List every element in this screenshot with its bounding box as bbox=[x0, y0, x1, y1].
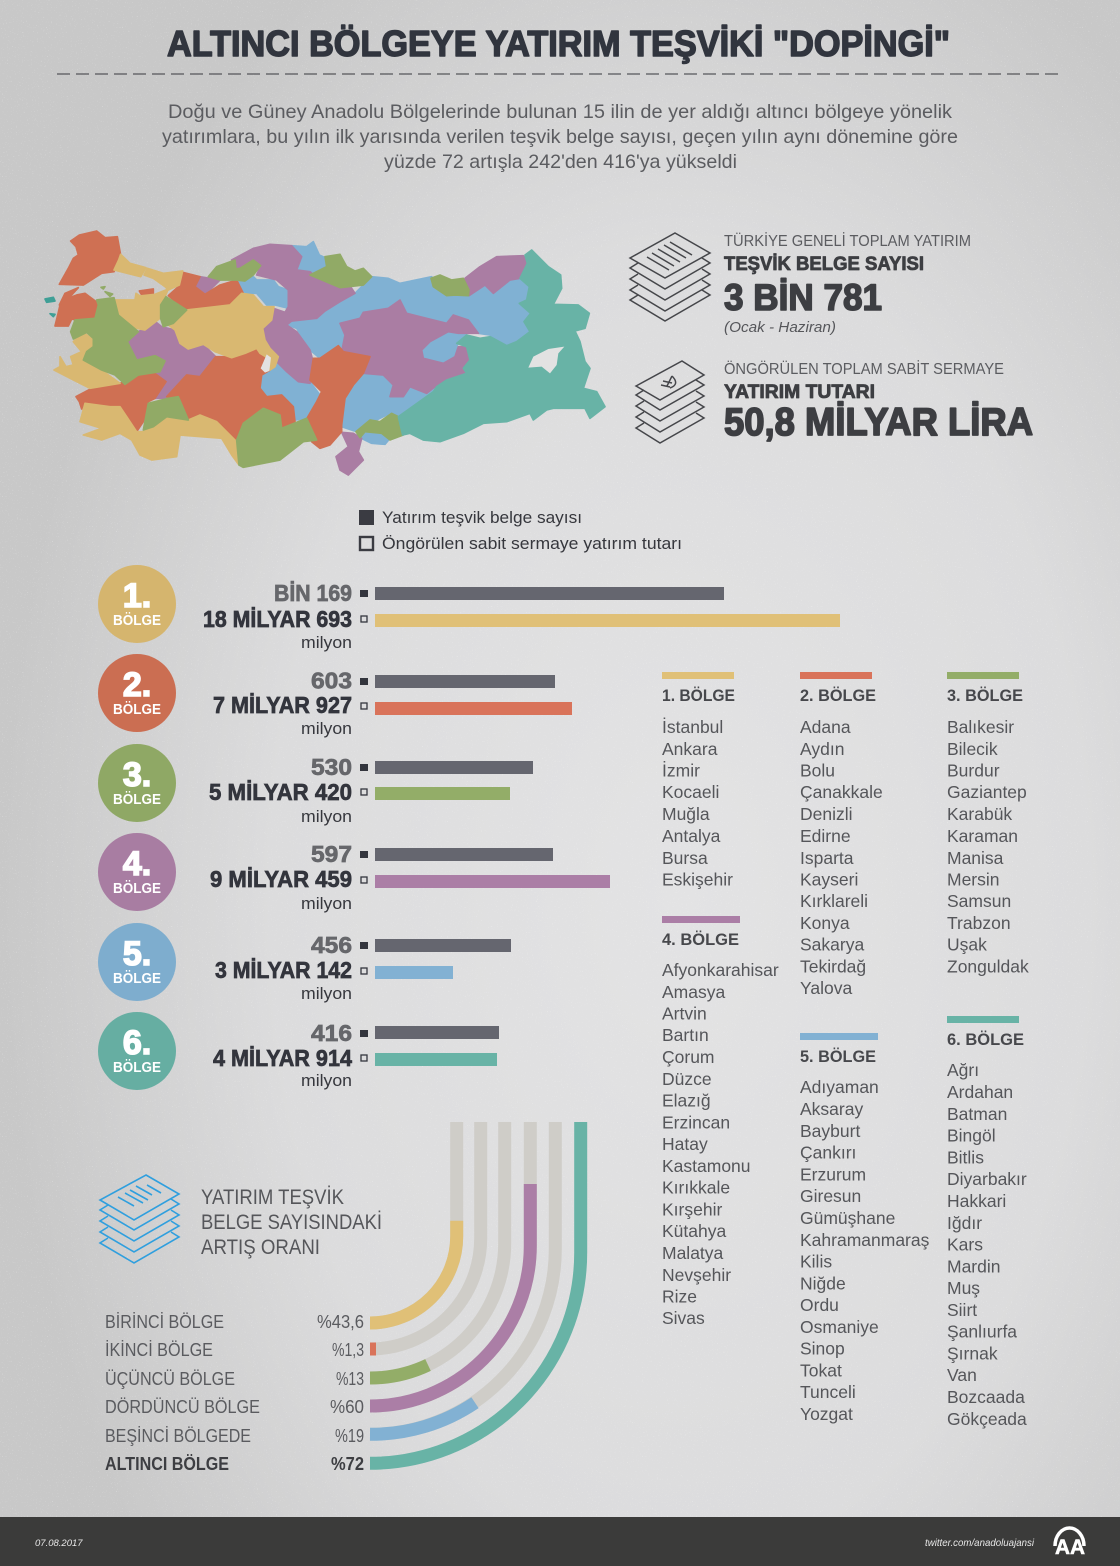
row: region 6: 6. bbox=[123, 1024, 151, 1062]
row: region 1: BİN 169 bbox=[274, 580, 352, 606]
list: region 5 provinces: Tunceli bbox=[800, 1382, 856, 1402]
list: region 5 provinces: Osmaniye bbox=[800, 1317, 879, 1337]
list: region 4 provinces: Artvin bbox=[662, 1004, 707, 1024]
row: region 3: BÖLGE bbox=[113, 791, 161, 808]
list: region 3 provinces: Mersin bbox=[947, 870, 1000, 890]
list: region 6 provinces: Kars bbox=[947, 1234, 983, 1254]
list: region 4 provinces: Amasya bbox=[662, 982, 725, 1002]
row: region 4: BÖLGE bbox=[113, 880, 161, 897]
list: region 1 provinces: Ankara bbox=[662, 739, 718, 759]
footer bbox=[0, 1517, 1120, 1566]
list: region 4 provinces: Kırıkkale bbox=[662, 1178, 730, 1198]
row: region 1: 1. bbox=[123, 577, 151, 615]
list: region 4 provinces: Kütahya bbox=[662, 1221, 726, 1241]
list: region 1 provinces: Muğla bbox=[662, 804, 710, 824]
chart labels: ÜÇÜNCÜ BÖLGE bbox=[105, 1369, 235, 1389]
list: region 5 provinces: Giresun bbox=[800, 1186, 861, 1206]
footer: 07.08.2017 bbox=[35, 1538, 83, 1549]
chart labels: %13 bbox=[336, 1369, 364, 1389]
list: region 5 provinces: Ordu bbox=[800, 1295, 839, 1315]
list: region 6 provinces: Ardahan bbox=[947, 1082, 1013, 1102]
intro text: Doğu ve Güney Anadolu Bölgelerinde bulunan 15 ilin de yer aldığı altıncı bölgeye yönelik bbox=[168, 101, 952, 123]
row: region 4: 9 MİLYAR 459 bbox=[210, 866, 352, 892]
list: region 3 provinces: Uşak bbox=[947, 934, 987, 954]
region 5 blue bbox=[236, 242, 531, 444]
chart labels: %19 bbox=[335, 1426, 364, 1446]
row: region 3 bbox=[98, 744, 533, 826]
row: region 4 bbox=[98, 833, 610, 913]
list: region 4 provinces: Bartın bbox=[662, 1025, 709, 1045]
chart labels: BİRİNCİ BÖLGE bbox=[105, 1312, 224, 1332]
list: region 2 provinces: Yalova bbox=[800, 978, 852, 998]
intro text: yatırımlara, bu yılın ilk yarısında verilen teşvik belge sayısı, geçen yılın aynı dönemine göre bbox=[162, 126, 958, 148]
list: region 6 provinces: Bingöl bbox=[947, 1126, 996, 1146]
row: region 6: BÖLGE bbox=[113, 1059, 161, 1076]
row: region 6 bbox=[98, 1012, 499, 1090]
list: region 5 provinces: Aksaray bbox=[800, 1099, 863, 1119]
row: region 2: 7 MİLYAR 927 bbox=[213, 692, 352, 718]
icon: blue document stack bbox=[100, 1175, 179, 1263]
heading: growth rate: ARTIŞ ORANI bbox=[201, 1236, 320, 1259]
list: region 5 provinces: Çankırı bbox=[800, 1142, 856, 1162]
icon: stack of documents bbox=[630, 233, 710, 321]
list: region 4 provinces: Kastamonu bbox=[662, 1156, 751, 1176]
row: region 4: 597 bbox=[311, 841, 352, 867]
list: region 6 provinces: 6. BÖLGE bbox=[947, 1030, 1024, 1049]
list: region 5 provinces: Kilis bbox=[800, 1252, 832, 1272]
stat: projected fixed capital: 50,8 MİLYAR LİRA bbox=[724, 401, 1033, 444]
list: region 6 provinces: Ağrı bbox=[947, 1060, 979, 1080]
list: region 6 provinces: Mardin bbox=[947, 1256, 1000, 1276]
list: region 2 provinces: Kayseri bbox=[800, 870, 858, 890]
chart labels: %72 bbox=[331, 1454, 364, 1474]
list: region 5 provinces: Erzurum bbox=[800, 1164, 866, 1184]
chart labels: ALTINCI BÖLGE bbox=[105, 1454, 229, 1474]
row: region 2 bbox=[98, 654, 572, 738]
chart labels: DÖRDÜNCÜ BÖLGE bbox=[105, 1397, 260, 1417]
list: region 4 provinces: Erzincan bbox=[662, 1112, 730, 1132]
stat: total incentive certificates: TÜRKİYE GENELİ TOPLAM YATIRIM bbox=[724, 232, 971, 250]
list: region 2 provinces: Isparta bbox=[800, 848, 854, 868]
list: region 1 provinces bbox=[662, 672, 735, 890]
chart labels: BEŞİNCİ BÖLGEDE bbox=[105, 1426, 251, 1446]
list: region 4 provinces: Elazığ bbox=[662, 1090, 711, 1110]
list: region 5 provinces: Tokat bbox=[800, 1360, 842, 1380]
heading: growth rate bbox=[201, 1186, 382, 1259]
list: region 3 provinces: Manisa bbox=[947, 848, 1004, 868]
list: region 1 provinces: Bursa bbox=[662, 848, 708, 868]
list: region 1 provinces: Kocaeli bbox=[662, 782, 719, 802]
list: region 1 provinces: 1. BÖLGE bbox=[662, 686, 735, 705]
list: region 5 provinces: Yozgat bbox=[800, 1404, 853, 1424]
list: region 2 provinces: Tekirdağ bbox=[800, 956, 866, 976]
list: region 6 provinces: Iğdır bbox=[947, 1213, 982, 1233]
region 1 yellow bbox=[54, 254, 278, 465]
list: region 4 provinces: Düzce bbox=[662, 1069, 712, 1089]
row: region 1: BÖLGE bbox=[113, 612, 161, 629]
list: region 2 provinces: Aydın bbox=[800, 739, 844, 759]
lakes bbox=[261, 347, 564, 373]
list: region 1 provinces: Antalya bbox=[662, 826, 721, 846]
list: region 5 provinces: Sinop bbox=[800, 1338, 845, 1358]
list: region 2 provinces: 2. BÖLGE bbox=[800, 686, 876, 705]
title: ALTINCI BÖLGEYE YATIRIM TEŞVİKİ "DOPİNGİ" bbox=[167, 23, 950, 64]
chart labels bbox=[105, 1312, 364, 1474]
row: region 6: 4 MİLYAR 914 bbox=[213, 1045, 352, 1071]
list: region 4 provinces: Rize bbox=[662, 1286, 697, 1306]
logo: Anadolu Agency: AA bbox=[1055, 1536, 1085, 1559]
list: region 4 provinces: Hatay bbox=[662, 1134, 708, 1154]
list: region 3 provinces: Karabük bbox=[947, 804, 1012, 824]
row: region 1: milyon bbox=[301, 633, 352, 652]
footer: twitter.com/anadoluajansi bbox=[925, 1537, 1035, 1549]
list: region 6 provinces: Van bbox=[947, 1365, 977, 1385]
stat: projected fixed capital: YATIRIM TUTARI bbox=[724, 382, 875, 403]
intro text: yüzde 72 artışla 242'den 416'ya yükseldi bbox=[384, 151, 737, 173]
list: region 2 provinces: Denizli bbox=[800, 804, 853, 824]
region 6 teal bbox=[45, 250, 605, 442]
list: region 3 provinces: Karaman bbox=[947, 826, 1018, 846]
list: region 4 provinces: Afyonkarahisar bbox=[662, 960, 779, 980]
chart labels: %43,6 bbox=[317, 1312, 364, 1332]
list: region 5 provinces: Gümüşhane bbox=[800, 1208, 895, 1228]
list: region 1 provinces: Eskişehir bbox=[662, 870, 733, 890]
row: region 5: 3 MİLYAR 142 bbox=[215, 957, 352, 983]
list: region 6 provinces: Siirt bbox=[947, 1300, 977, 1320]
row: region 2: 603 bbox=[311, 668, 352, 694]
list: region 1 provinces: İstanbul bbox=[662, 717, 723, 737]
row: region 3: 3. bbox=[123, 756, 151, 794]
stat: total incentive certificates bbox=[724, 232, 971, 336]
list: region 5 provinces: Bayburt bbox=[800, 1121, 860, 1141]
row: region 1 bbox=[98, 565, 840, 652]
row: region 5: BÖLGE bbox=[113, 970, 161, 987]
list: region 3 provinces: Bilecik bbox=[947, 739, 998, 759]
row: region 2: milyon bbox=[301, 719, 352, 738]
list: region 3 provinces: Zonguldak bbox=[947, 956, 1029, 976]
list: region 3 provinces: Samsun bbox=[947, 891, 1011, 911]
list: region 5 provinces: Adıyaman bbox=[800, 1077, 879, 1097]
row: region 6: milyon bbox=[301, 1071, 352, 1090]
region 4 purple bbox=[127, 244, 527, 475]
legend bbox=[359, 508, 682, 553]
list: region 3 provinces: Gaziantep bbox=[947, 782, 1027, 802]
list: region 4 provinces: Kırşehir bbox=[662, 1200, 722, 1220]
list: region 3 provinces: Burdur bbox=[947, 760, 1000, 780]
row: region 3: milyon bbox=[301, 807, 352, 826]
list: region 2 provinces: Konya bbox=[800, 913, 850, 933]
list: region 6 provinces: Bozcaada bbox=[947, 1387, 1025, 1407]
list: region 4 provinces bbox=[662, 916, 779, 1328]
row: region 5 bbox=[98, 923, 511, 1003]
list: region 2 provinces: Çanakkale bbox=[800, 782, 883, 802]
list: region 2 provinces: Bolu bbox=[800, 760, 835, 780]
stat: projected fixed capital: ÖNGÖRÜLEN TOPLAM SABİT SERMAYE bbox=[724, 360, 1004, 378]
row: region 1: 18 MİLYAR 693 bbox=[203, 606, 352, 632]
list: region 2 provinces bbox=[800, 672, 883, 998]
stat: total incentive certificates: TEŞVİK BELGE SAYISI bbox=[724, 254, 924, 275]
map of Turkey by incentive region bbox=[45, 231, 605, 475]
row: region 6: 416 bbox=[311, 1020, 352, 1046]
list: region 5 provinces: 5. BÖLGE bbox=[800, 1047, 876, 1066]
legend: Öngörülen sabit sermaye yatırım tutarı bbox=[382, 534, 682, 553]
row: region 2: 2. bbox=[123, 666, 151, 704]
list: region 5 provinces: Kahramanmaraş bbox=[800, 1230, 930, 1250]
list: region 6 provinces bbox=[947, 1016, 1027, 1429]
list: region 3 provinces bbox=[947, 672, 1029, 976]
chart labels: İKİNCİ BÖLGE bbox=[105, 1340, 213, 1360]
list: region 4 provinces: Çorum bbox=[662, 1047, 715, 1067]
list: region 6 provinces: Muş bbox=[947, 1278, 980, 1298]
list: region 5 provinces: Niğde bbox=[800, 1274, 846, 1294]
legend: Yatırım teşvik belge sayısı bbox=[382, 508, 582, 527]
list: region 4 provinces: 4. BÖLGE bbox=[662, 930, 739, 949]
row: region 4: 4. bbox=[123, 845, 151, 883]
list: region 6 provinces: Şanlıurfa bbox=[947, 1322, 1017, 1342]
row: region 5: milyon bbox=[301, 984, 352, 1003]
list: region 6 provinces: Şırnak bbox=[947, 1344, 998, 1364]
intro text bbox=[162, 101, 958, 173]
list: region 6 provinces: Bitlis bbox=[947, 1148, 984, 1168]
region 3 green bbox=[71, 254, 469, 467]
list: region 2 provinces: Adana bbox=[800, 717, 851, 737]
list: region 4 provinces: Nevşehir bbox=[662, 1265, 731, 1285]
stat: total incentive certificates: (Ocak - Haziran) bbox=[724, 319, 836, 336]
list: region 4 provinces: Malatya bbox=[662, 1243, 724, 1263]
list: region 4 provinces: Sivas bbox=[662, 1308, 705, 1328]
region 2 red bbox=[55, 231, 370, 448]
list: region 3 provinces: Balıkesir bbox=[947, 717, 1014, 737]
heading: growth rate: YATIRIM TEŞVİK bbox=[201, 1186, 344, 1209]
list: region 3 provinces: Trabzon bbox=[947, 913, 1011, 933]
list: region 6 provinces: Gökçeada bbox=[947, 1409, 1027, 1429]
row: region 5: 456 bbox=[311, 932, 352, 958]
chart labels: %1,3 bbox=[332, 1340, 364, 1360]
row: region 2: BÖLGE bbox=[113, 701, 161, 718]
list: region 6 provinces: Hakkari bbox=[947, 1191, 1006, 1211]
list: region 2 provinces: Sakarya bbox=[800, 934, 864, 954]
row: region 5: 5. bbox=[123, 935, 151, 973]
list: region 5 provinces bbox=[800, 1033, 930, 1424]
row: region 3: 530 bbox=[311, 754, 352, 780]
row: region 3: 5 MİLYAR 420 bbox=[209, 779, 352, 805]
heading: growth rate: BELGE SAYISINDAKİ bbox=[201, 1211, 382, 1234]
list: region 1 provinces: İzmir bbox=[662, 760, 700, 780]
list: region 2 provinces: Edirne bbox=[800, 826, 851, 846]
stat: projected fixed capital bbox=[724, 360, 1033, 444]
stat: total incentive certificates: 3 BİN 781 bbox=[724, 277, 882, 318]
list: region 6 provinces: Batman bbox=[947, 1104, 1007, 1124]
icon: stack of lira notes bbox=[636, 361, 704, 443]
chart: concentric growth arcs bbox=[370, 1122, 581, 1463]
list: region 3 provinces: 3. BÖLGE bbox=[947, 686, 1023, 705]
list: region 2 provinces: Kırklareli bbox=[800, 891, 868, 911]
row: region 4: milyon bbox=[301, 894, 352, 913]
chart labels: %60 bbox=[330, 1397, 364, 1417]
list: region 6 provinces: Diyarbakır bbox=[947, 1169, 1027, 1189]
